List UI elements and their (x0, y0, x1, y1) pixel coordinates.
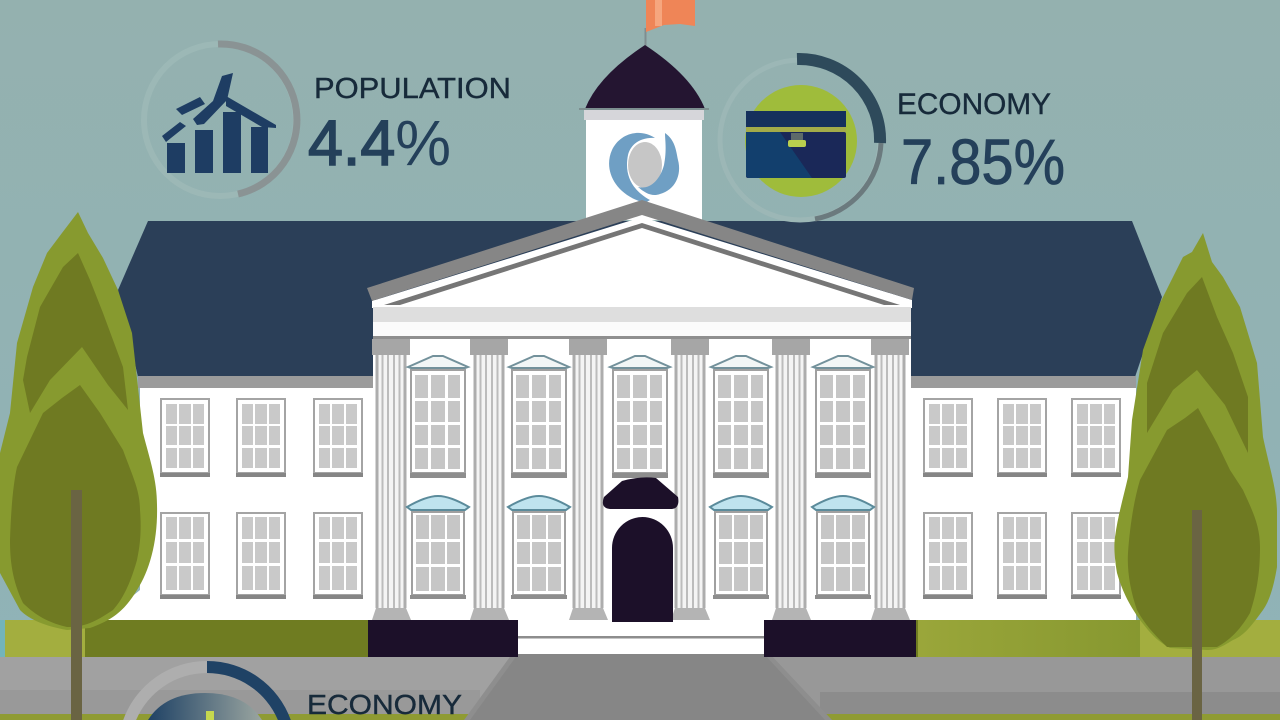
icon: briefcase (745, 85, 857, 197)
flag (644, 0, 695, 48)
label: ECONOMY (897, 88, 1051, 121)
progress ring (144, 44, 297, 196)
windows: right wing (923, 399, 1121, 599)
pediment (367, 200, 914, 308)
label: POPULATION (314, 73, 511, 105)
stat: economy top (720, 59, 1065, 220)
icon disc (148, 693, 262, 720)
tree: left (0, 212, 157, 720)
central portico (367, 200, 914, 622)
lower windows (407, 496, 874, 599)
windows: left wing (160, 399, 363, 599)
door canopy (603, 477, 678, 509)
stat: population (144, 44, 511, 196)
label: ECONOMY (307, 689, 462, 720)
progress ring (720, 59, 881, 220)
building wings (103, 376, 1136, 620)
icon: bar chart house (162, 73, 276, 173)
roof (118, 221, 1162, 377)
tower logo (609, 133, 679, 203)
value: 4.4% (308, 107, 451, 179)
dome (585, 45, 705, 109)
progress ring (123, 661, 291, 720)
door (612, 517, 673, 622)
value: 7.85% (901, 126, 1065, 198)
tower with dome, flag and logo (579, 0, 709, 220)
upper windows (408, 356, 873, 478)
columns (372, 339, 910, 620)
tree: right (1114, 233, 1277, 720)
stat: economy bottom (123, 661, 462, 720)
entrance steps and plinths (368, 620, 916, 657)
ground: lawn, road and path (0, 620, 1280, 720)
entablature (373, 307, 911, 339)
